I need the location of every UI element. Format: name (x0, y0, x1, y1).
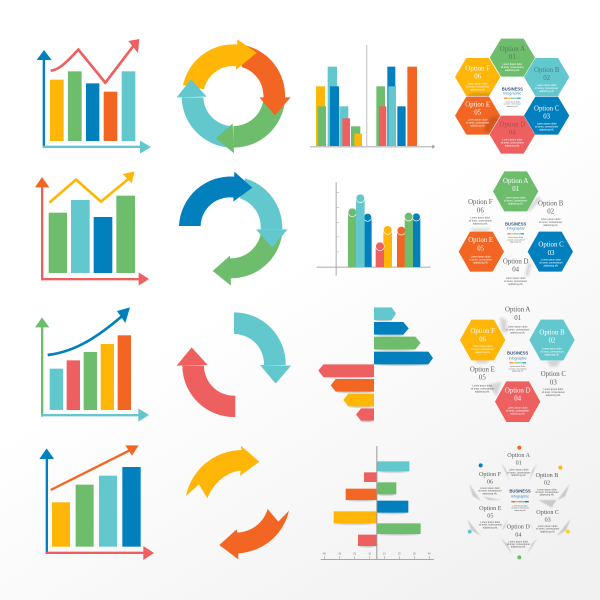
centre heading: infographic (511, 495, 529, 499)
trend arrow (51, 39, 139, 83)
option F: Lorem ipsum dolor (470, 217, 490, 220)
option E (479, 506, 502, 529)
bars (52, 467, 141, 547)
axes (317, 182, 431, 276)
option E: sit amet, consectetuer (469, 258, 492, 261)
centre heading: sit amet, consectetuer (503, 103, 522, 106)
option B: Option B (539, 329, 565, 336)
option F: adipiscing elit. (475, 351, 490, 354)
centre heading: adipiscing elit. (512, 370, 524, 373)
trend arrow (51, 445, 139, 490)
option A: 01 (514, 315, 521, 322)
option A: Option A (503, 178, 528, 185)
column chart: overlapping bars (310, 45, 435, 149)
option F: 06 (477, 207, 484, 214)
option E: sit amet, consectetuer (471, 387, 494, 390)
option A (503, 178, 528, 206)
option B: Option B (538, 200, 564, 207)
option F: 06 (487, 480, 493, 486)
centre heading: adipiscing elit. (510, 241, 522, 244)
option D: Lorem ipsum dolor (502, 139, 522, 142)
option C: Lorem ipsum dolor (537, 123, 557, 126)
option D: Lorem ipsum dolor (506, 277, 526, 280)
centre heading: Lorem ipsum dolor (508, 237, 524, 239)
option D (500, 122, 525, 148)
shadows (470, 197, 553, 277)
option F: Option F (468, 199, 493, 206)
option E: Lorem ipsum dolor (468, 118, 488, 121)
option F: Option F (465, 65, 490, 72)
option C: Lorem ipsum dolor (543, 388, 563, 391)
option D: 04 (515, 532, 521, 538)
centre heading: infographic (507, 227, 525, 231)
option A (505, 307, 530, 334)
option C: 03 (550, 379, 557, 386)
option B: 02 (543, 75, 551, 82)
bar shadows (324, 319, 428, 422)
option F: Lorem ipsum dolor (473, 345, 493, 348)
scale labels: -20 (353, 554, 357, 556)
option F: Lorem ipsum dolor (468, 82, 488, 85)
circular arrows 2: three colours (179, 172, 288, 286)
option C: adipiscing elit. (539, 129, 554, 132)
option A (500, 46, 525, 72)
option B: 02 (544, 481, 550, 487)
option E: sit amet, consectetuer (466, 121, 489, 124)
option E: Option E (468, 237, 493, 244)
line chart 3: rising bars with curve (35, 307, 149, 422)
option D: Option D (503, 258, 529, 265)
right arrows (374, 307, 433, 364)
option F: sit amet, consectetuer (471, 348, 494, 351)
option E: adipiscing elit. (475, 390, 490, 393)
option F: sit amet, consectetuer (469, 220, 492, 223)
cylinders group 2 (376, 226, 392, 267)
option B: sit amet, consectetuer (535, 491, 559, 494)
centre heading: sit amet, consectetuer (509, 367, 527, 370)
option A: Lorem ipsum dolor (508, 325, 528, 328)
option B: Option B (536, 473, 558, 479)
option D: 04 (514, 396, 522, 403)
hexagon panel 2: three filled (459, 171, 573, 286)
option B (538, 200, 564, 227)
option E (470, 366, 495, 393)
option F: sit amet, consectetuer (478, 490, 502, 493)
hexagons (455, 39, 569, 154)
option F: 06 (474, 73, 482, 80)
option B: adipiscing elit. (545, 353, 560, 356)
centre heading: BUSINESS (502, 86, 523, 91)
option B: Lorem ipsum dolor (541, 218, 561, 221)
option C: Option C (534, 106, 560, 113)
arrow bar chart: diverging (318, 307, 433, 422)
option F: adipiscing elit. (473, 223, 488, 226)
option D: Option D (507, 525, 530, 531)
option A: sit amet, consectetuer (501, 66, 524, 69)
bars (50, 71, 135, 141)
option A: Option A (507, 453, 531, 459)
option F (470, 328, 495, 354)
shadows (473, 317, 562, 397)
option D (507, 525, 530, 549)
option A: adipiscing elit. (511, 474, 526, 477)
option B: Lorem ipsum dolor (542, 347, 562, 350)
option C: Option C (536, 510, 559, 516)
option D: sit amet, consectetuer (504, 280, 527, 283)
option C: Lorem ipsum dolor (538, 525, 558, 528)
option E: 05 (477, 245, 485, 252)
option B: 02 (547, 209, 555, 216)
option E: 05 (474, 109, 482, 116)
option B: adipiscing elit. (540, 494, 555, 497)
scale labels: 10 (383, 554, 386, 556)
hexagon panel 1: six filled (455, 39, 569, 154)
centre heading: infographic (509, 356, 527, 360)
fold shadows (467, 463, 571, 554)
option C: sit amet, consectetuer (535, 126, 558, 129)
option A: 01 (509, 54, 516, 61)
hexagon panel 4: paper folds (467, 446, 571, 559)
option B (539, 329, 565, 356)
scale labels (322, 554, 431, 556)
option A: Lorem ipsum dolor (506, 197, 526, 200)
option F (478, 472, 502, 495)
centre heading: Lorem ipsum dolor (505, 101, 520, 103)
option D: adipiscing elit. (505, 145, 520, 148)
option D: sit amet, consectetuer (506, 409, 529, 412)
option A: sit amet, consectetuer (506, 328, 529, 331)
centre heading (505, 221, 527, 244)
option A: sit amet, consectetuer (507, 471, 530, 474)
option A: Option A (500, 46, 525, 53)
option E: adipiscing elit. (483, 526, 498, 529)
option A: adipiscing elit. (505, 69, 520, 72)
option C: 03 (543, 114, 551, 121)
option C (538, 242, 564, 268)
axes (37, 50, 151, 154)
option E: Lorem ipsum dolor (472, 384, 492, 387)
scale labels: -30 (338, 554, 342, 556)
scale labels: 30 (413, 554, 416, 556)
option F (465, 65, 490, 91)
option E: Option E (479, 506, 502, 512)
option E: sit amet, consectetuer (479, 524, 502, 527)
line chart 1: bars with zigzag trend (37, 39, 151, 154)
bar shadows (335, 471, 419, 547)
option D: adipiscing elit. (508, 283, 523, 286)
centre heading: BUSINESS (509, 488, 531, 493)
option F: Lorem ipsum dolor (480, 487, 500, 490)
option D: adipiscing elit. (511, 546, 526, 549)
option E: adipiscing elit. (470, 124, 485, 127)
centre heading: Lorem ipsum dolor (512, 505, 528, 507)
left arrows (318, 364, 374, 421)
option C (536, 510, 559, 533)
option E: Option E (470, 366, 495, 373)
option A: adipiscing elit. (508, 203, 523, 206)
option B: sit amet, consectetuer (539, 221, 562, 224)
option C: sit amet, consectetuer (536, 528, 559, 531)
option D: 04 (509, 130, 516, 137)
cylinders group 1 (348, 194, 372, 267)
option E: adipiscing elit. (473, 261, 488, 264)
option C (541, 371, 566, 397)
option F: adipiscing elit. (470, 88, 485, 91)
centre heading (507, 350, 529, 373)
option A: Option A (505, 307, 530, 314)
right bars (376, 67, 417, 146)
column chart: cylinders (317, 182, 431, 276)
option B: Lorem ipsum dolor (537, 488, 557, 491)
option D: adipiscing elit. (510, 412, 525, 415)
axes (310, 45, 435, 149)
hexagons (460, 320, 575, 422)
scale labels: 40 (428, 554, 431, 556)
line chart 4: rising bars with straight arrow (39, 445, 154, 560)
option B: adipiscing elit. (539, 90, 554, 93)
option B: adipiscing elit. (543, 224, 558, 227)
option E: 05 (479, 375, 486, 382)
option D: Option D (505, 387, 531, 394)
horizontal bar chart with scale (321, 446, 434, 560)
bars (50, 335, 131, 410)
centre heading: sit amet, consectetuer (507, 238, 525, 241)
centre heading: adipiscing elit. (507, 105, 519, 108)
bars (49, 196, 135, 273)
option A: 01 (516, 461, 522, 467)
scale labels: 20 (398, 554, 401, 556)
centre heading: BUSINESS (507, 350, 529, 355)
option E: Option E (465, 101, 490, 108)
option F: Option F (470, 328, 495, 335)
option C: adipiscing elit. (546, 394, 561, 397)
option F: sit amet, consectetuer (466, 85, 489, 88)
option C: Lorem ipsum dolor (541, 259, 561, 262)
option C: adipiscing elit. (540, 530, 555, 533)
option D (505, 387, 531, 415)
circular arrows 4: forked tails (186, 446, 289, 559)
option C: 03 (545, 518, 551, 524)
option C: Option C (541, 371, 566, 378)
option B: Lorem ipsum dolor (537, 84, 557, 87)
option A: Lorem ipsum dolor (509, 469, 529, 472)
axes (35, 177, 149, 286)
option B: sit amet, consectetuer (540, 350, 564, 353)
option D: Option D (500, 122, 525, 129)
trend arrow (48, 307, 130, 355)
option B: 02 (549, 338, 556, 345)
option A: Lorem ipsum dolor (502, 63, 522, 66)
option A: sit amet, consectetuer (504, 200, 527, 203)
option C: adipiscing elit. (544, 265, 559, 268)
option A: adipiscing elit. (510, 331, 525, 334)
centre heading: sit amet, consectetuer (511, 507, 529, 510)
option C: Option C (538, 242, 564, 249)
option E: Lorem ipsum dolor (471, 255, 491, 258)
option C: sit amet, consectetuer (539, 262, 563, 265)
option E: Lorem ipsum dolor (480, 521, 500, 524)
option D: sit amet, consectetuer (507, 543, 530, 546)
option C: sit amet, consectetuer (542, 391, 565, 394)
centre heading: Lorem ipsum dolor (510, 366, 526, 368)
option A: 01 (512, 186, 519, 193)
centre heading: adipiscing elit. (514, 509, 526, 512)
option C (534, 106, 560, 132)
centre heading (502, 86, 523, 108)
line chart 2: bars with zigzag trend (35, 171, 149, 286)
hexagons (459, 171, 573, 272)
left bars (316, 67, 362, 146)
option B: Option B (534, 67, 560, 74)
option A (507, 453, 531, 477)
marker dots (468, 446, 570, 559)
hexagon panel 3: three filled (460, 307, 575, 422)
axes (39, 448, 154, 560)
option F: 06 (479, 336, 487, 343)
cylinders group 3 (397, 212, 420, 267)
centre heading: infographic (503, 92, 521, 96)
option B (535, 473, 559, 497)
axes (35, 317, 149, 422)
option F: Option F (479, 472, 502, 478)
circular arrows 3: two colours (177, 312, 291, 417)
circular arrows 1: four colours (177, 39, 291, 153)
option E (465, 101, 490, 127)
trend arrow (49, 171, 135, 203)
axes (321, 446, 434, 560)
centre heading (509, 488, 531, 512)
option D: sit amet, consectetuer (501, 142, 524, 145)
option C: 03 (548, 250, 555, 257)
option F (468, 199, 493, 226)
option D: 04 (512, 266, 520, 273)
option D (503, 258, 529, 286)
scale labels: -10 (368, 554, 372, 556)
centre heading: BUSINESS (505, 221, 527, 226)
option E (468, 237, 493, 264)
option D: Lorem ipsum dolor (508, 540, 528, 543)
option F: adipiscing elit. (483, 492, 498, 495)
option B (534, 67, 560, 93)
option B: sit amet, consectetuer (535, 87, 558, 90)
option E: 05 (487, 514, 493, 520)
bars (334, 461, 421, 546)
option D: Lorem ipsum dolor (508, 406, 528, 409)
scale labels: -40 (322, 554, 326, 556)
